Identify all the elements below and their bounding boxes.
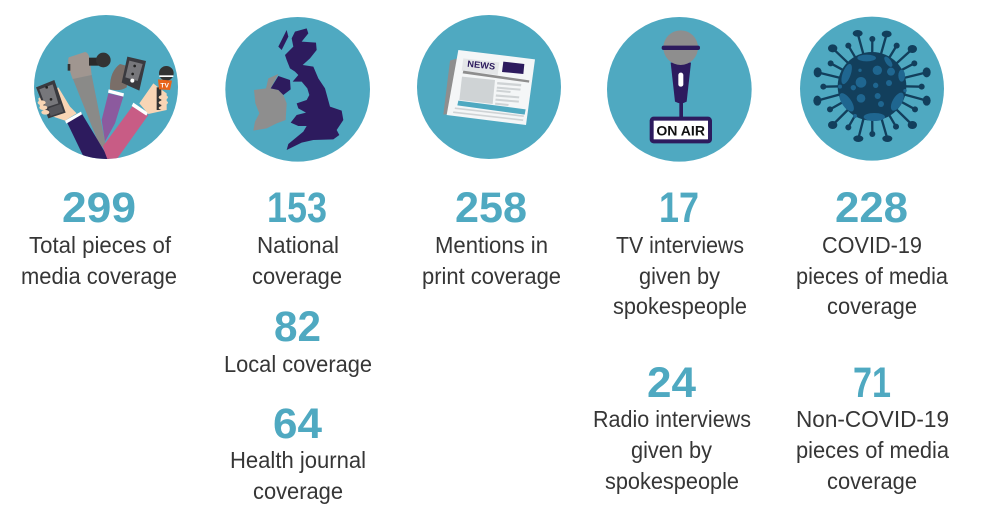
stat: 228 COVID-19 coverage: coverage [827, 293, 917, 319]
stat: 228 COVID-19 coverage: pieces of media [796, 263, 948, 289]
icon: newspaper [417, 15, 561, 159]
stat: 24 radio interviews: given by [631, 437, 712, 463]
stat: 17 TV interviews: TV interviews [616, 232, 744, 258]
stat: 17 TV interviews: given by [639, 263, 720, 289]
stat: 82 local coverage: Local coverage [224, 351, 372, 377]
stat: 71 non-COVID-19 coverage [796, 359, 949, 494]
stat: 64 health journal coverage: 64 [273, 400, 322, 448]
icon: map of UK and Ireland [225, 17, 370, 162]
stat: 82 local coverage [224, 303, 372, 377]
stat: 71 non-COVID-19 coverage: Non-COVID-19 [796, 406, 949, 432]
stat: 24 radio interviews: Radio interviews [593, 406, 751, 432]
stat: 64 health journal coverage [230, 400, 366, 504]
stat: 299 total pieces: media coverage [21, 263, 177, 289]
icon: hands holding microphones and recorders [34, 15, 178, 162]
stat: 17 TV interviews: spokespeople [613, 293, 747, 319]
stat: 228 COVID-19 coverage: COVID-19 [822, 232, 922, 258]
stat: 258 mentions in print [422, 184, 561, 289]
stat: 299 total pieces: 299 [62, 184, 136, 232]
stat: 17 TV interviews: 17 [659, 184, 699, 232]
icon: coronavirus [800, 17, 944, 161]
stat: 153 national coverage: National [257, 232, 339, 258]
icon: ON AIR microphone [607, 17, 752, 162]
stat: 24 radio interviews: 24 [647, 359, 696, 407]
stat: 258 mentions in print: 258 [455, 184, 527, 232]
stat: 24 radio interviews: spokespeople [605, 468, 739, 494]
icon: hands holding microphones and recorders: TV [160, 82, 169, 89]
stat: 228 COVID-19 coverage: 228 [835, 184, 908, 232]
icon: ON AIR microphone: ON AIR [656, 122, 705, 138]
stat: 153 national coverage [252, 184, 342, 289]
icon: newspaper: NEWS [467, 59, 496, 72]
stat: 153 national coverage: 153 [267, 184, 327, 232]
stat: 24 radio interviews [593, 359, 751, 494]
stat: 71 non-COVID-19 coverage: pieces of media [796, 437, 949, 463]
stat: 228 COVID-19 coverage [796, 184, 948, 319]
stat: 153 national coverage: coverage [252, 263, 342, 289]
stat: 299 total pieces [21, 184, 177, 289]
stat: 17 TV interviews [613, 184, 747, 319]
stat: 64 health journal coverage: coverage [253, 478, 343, 504]
stat: 82 local coverage: 82 [274, 303, 321, 351]
stat: 64 health journal coverage: Health journal [230, 447, 366, 473]
stat: 71 non-COVID-19 coverage: 71 [853, 359, 891, 407]
stat: 299 total pieces: Total pieces of [29, 232, 172, 258]
stat: 258 mentions in print: print coverage [422, 263, 561, 289]
stat: 71 non-COVID-19 coverage: coverage [827, 468, 917, 494]
stat: 258 mentions in print: Mentions in [435, 232, 548, 258]
